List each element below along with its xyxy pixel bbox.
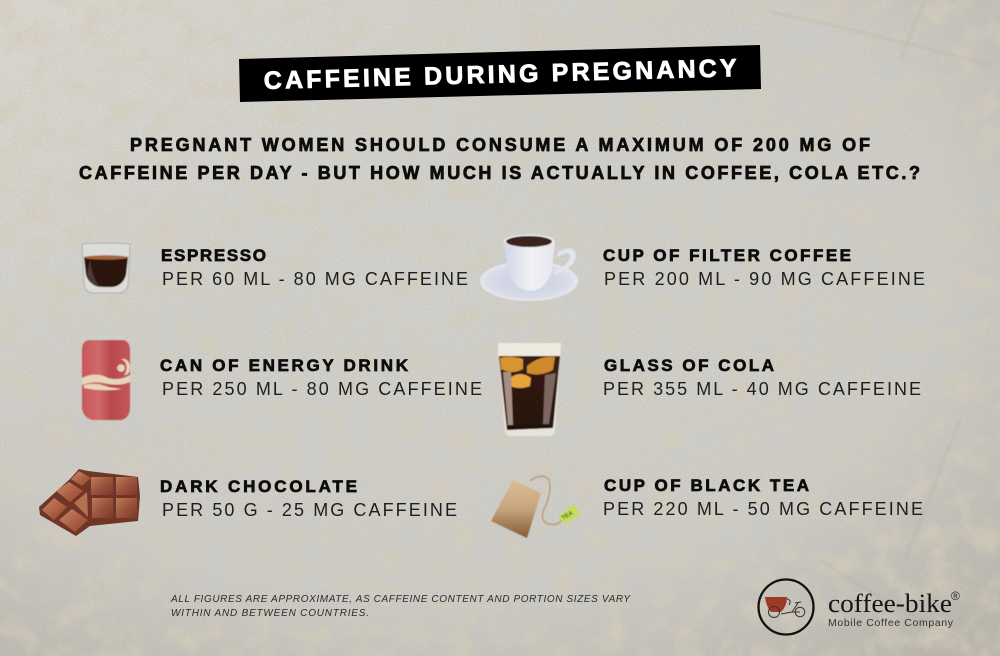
text: filter coffee: CUP OF FILTER COFFEE [603,246,851,265]
footnote: WITHIN AND BETWEEN COUNTRIES. [171,608,369,619]
title banner [239,45,761,102]
intro text [79,135,920,183]
intro text: CAFFEINE PER DAY - BUT HOW MUCH IS ACTUALLY IN COFFEE, COLA ETC.? [79,163,920,183]
text: espresso: ESPRESSO [161,246,266,265]
text: cola: GLASS OF COLA [604,356,774,375]
text: energy drink: CAN OF ENERGY DRINK [160,356,409,375]
logo: coffee-bike: ® [951,589,960,603]
text: black tea: CUP OF BLACK TEA [604,476,809,495]
text: filter coffee: PER 200 ML - 90 MG CAFFEINE [604,269,925,289]
text: dark chocolate: PER 50 G - 25 MG CAFFEINE [162,500,457,520]
footnote [170,594,631,619]
icon: filter coffee cup [480,234,578,301]
text: black tea: PER 220 ML - 50 MG CAFFEINE [603,499,923,519]
icon: chocolate bar [39,469,140,536]
text: energy drink: PER 250 ML - 80 MG CAFFEINE [162,379,482,399]
text: espresso [161,246,468,289]
text: cola [603,356,921,399]
footnote: ALL FIGURES ARE APPROXIMATE, AS CAFFEINE CONTENT AND PORTION SIZES VARY [170,594,631,605]
icon: logo badge [758,580,814,634]
intro text: PREGNANT WOMEN SHOULD CONSUME A MAXIMUM OF 200 MG OF [130,135,870,155]
icon: energy drink can [82,336,130,420]
logo: coffee-bike: Mobile Coffee Company [828,617,954,629]
text: dark chocolate: DARK CHOCOLATE [160,477,357,496]
title banner: CAFFEINE DURING PREGNANCY [263,54,737,95]
wordmark: coffee-bike [828,589,952,618]
icon: tea bag: TEA [561,510,575,522]
text: energy drink [160,356,482,399]
text: black tea [603,476,923,519]
icon: glass of cola [498,343,561,436]
text: espresso: PER 60 ML - 80 MG CAFFEINE [162,269,468,289]
logo: coffee-bike [758,580,960,634]
text: filter coffee [603,246,925,289]
icon: tea bag [491,476,580,538]
text: cola: PER 355 ML - 40 MG CAFFEINE [603,379,921,399]
text: dark chocolate [160,477,457,520]
icon: espresso glass [82,243,130,293]
